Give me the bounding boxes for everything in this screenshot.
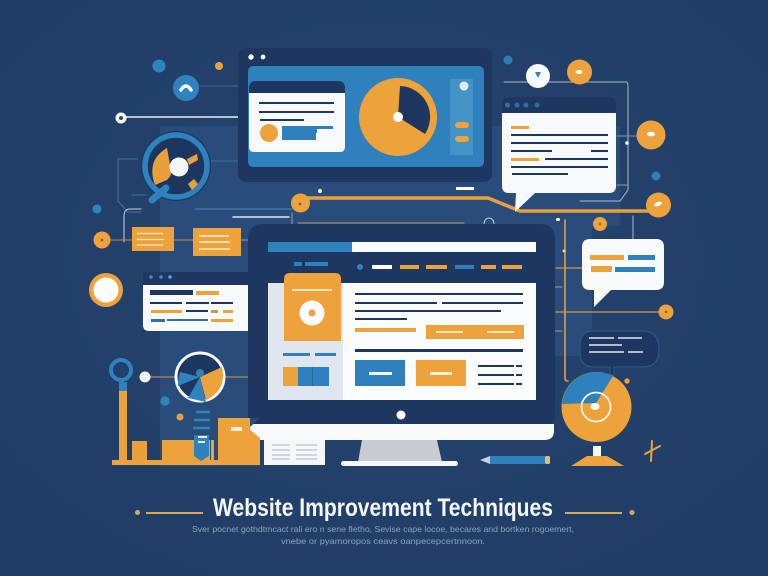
panel: lighter backdrop <box>160 126 620 466</box>
icon: ring node left <box>116 112 126 124</box>
panel: speech bubble window <box>502 97 616 212</box>
call to action bars <box>355 325 524 339</box>
connector lines <box>110 82 664 381</box>
blue button <box>355 360 405 386</box>
top monitor <box>238 48 492 182</box>
document under monitor <box>264 440 325 465</box>
icon: orange target node <box>658 304 674 320</box>
icon: striped pin <box>193 412 210 461</box>
icon: key pole <box>111 360 131 460</box>
icon: sparkle cross <box>645 441 660 461</box>
text lines <box>355 293 523 352</box>
small decorative dots <box>92 56 660 384</box>
icon: orange badge right <box>636 120 666 150</box>
icon: arrow badge <box>173 75 199 101</box>
title block <box>135 494 634 546</box>
hero card <box>284 273 341 341</box>
icon: white ring <box>89 273 123 307</box>
top monitor window card <box>249 81 345 152</box>
navigation menu <box>294 262 522 270</box>
panel: left table window <box>143 272 248 331</box>
icon: orange badge top <box>567 60 592 84</box>
icon: orange badge lower right <box>646 192 671 218</box>
title: Website Improvement Techniques <box>213 494 553 522</box>
subtitle <box>192 524 574 546</box>
monitor stand <box>341 440 458 466</box>
bar chart base <box>112 418 260 465</box>
subtitle: vnebe or pyamoropos ceavs oanpecepcertnnoon. <box>281 536 485 546</box>
orange button <box>416 360 466 386</box>
icon: white chat badge <box>526 64 550 88</box>
icon: magnifier gauge <box>141 131 211 201</box>
orange note card one <box>132 227 174 251</box>
icon: orange connector node <box>291 194 310 212</box>
subtitle: Sver pocnet gothdtmcact rali ero n sene fletho, Sevise cape locoe, becares and bortken rogoemert, <box>192 524 574 534</box>
icon: node dot <box>140 372 150 382</box>
icon: dial pie chart <box>176 353 224 402</box>
main monitor <box>248 224 555 466</box>
sidebar links <box>283 353 336 386</box>
panel: chat bubble right <box>582 239 664 307</box>
icon: pencil <box>480 456 550 464</box>
address bar <box>268 242 536 252</box>
list lines <box>478 365 522 385</box>
title right rule <box>565 510 634 515</box>
icon: left orange node <box>94 232 110 248</box>
top monitor side control <box>450 79 473 155</box>
icon: webcam disc <box>562 372 632 466</box>
web page content <box>268 273 536 400</box>
title left rule <box>135 510 203 515</box>
icon: orange dot <box>176 414 184 420</box>
panel: dark chat bubble <box>580 331 659 375</box>
icon: blue dot <box>160 396 170 406</box>
orange note card two <box>193 228 241 256</box>
icon: orange small node <box>593 217 607 231</box>
top monitor pie chart <box>359 78 437 156</box>
